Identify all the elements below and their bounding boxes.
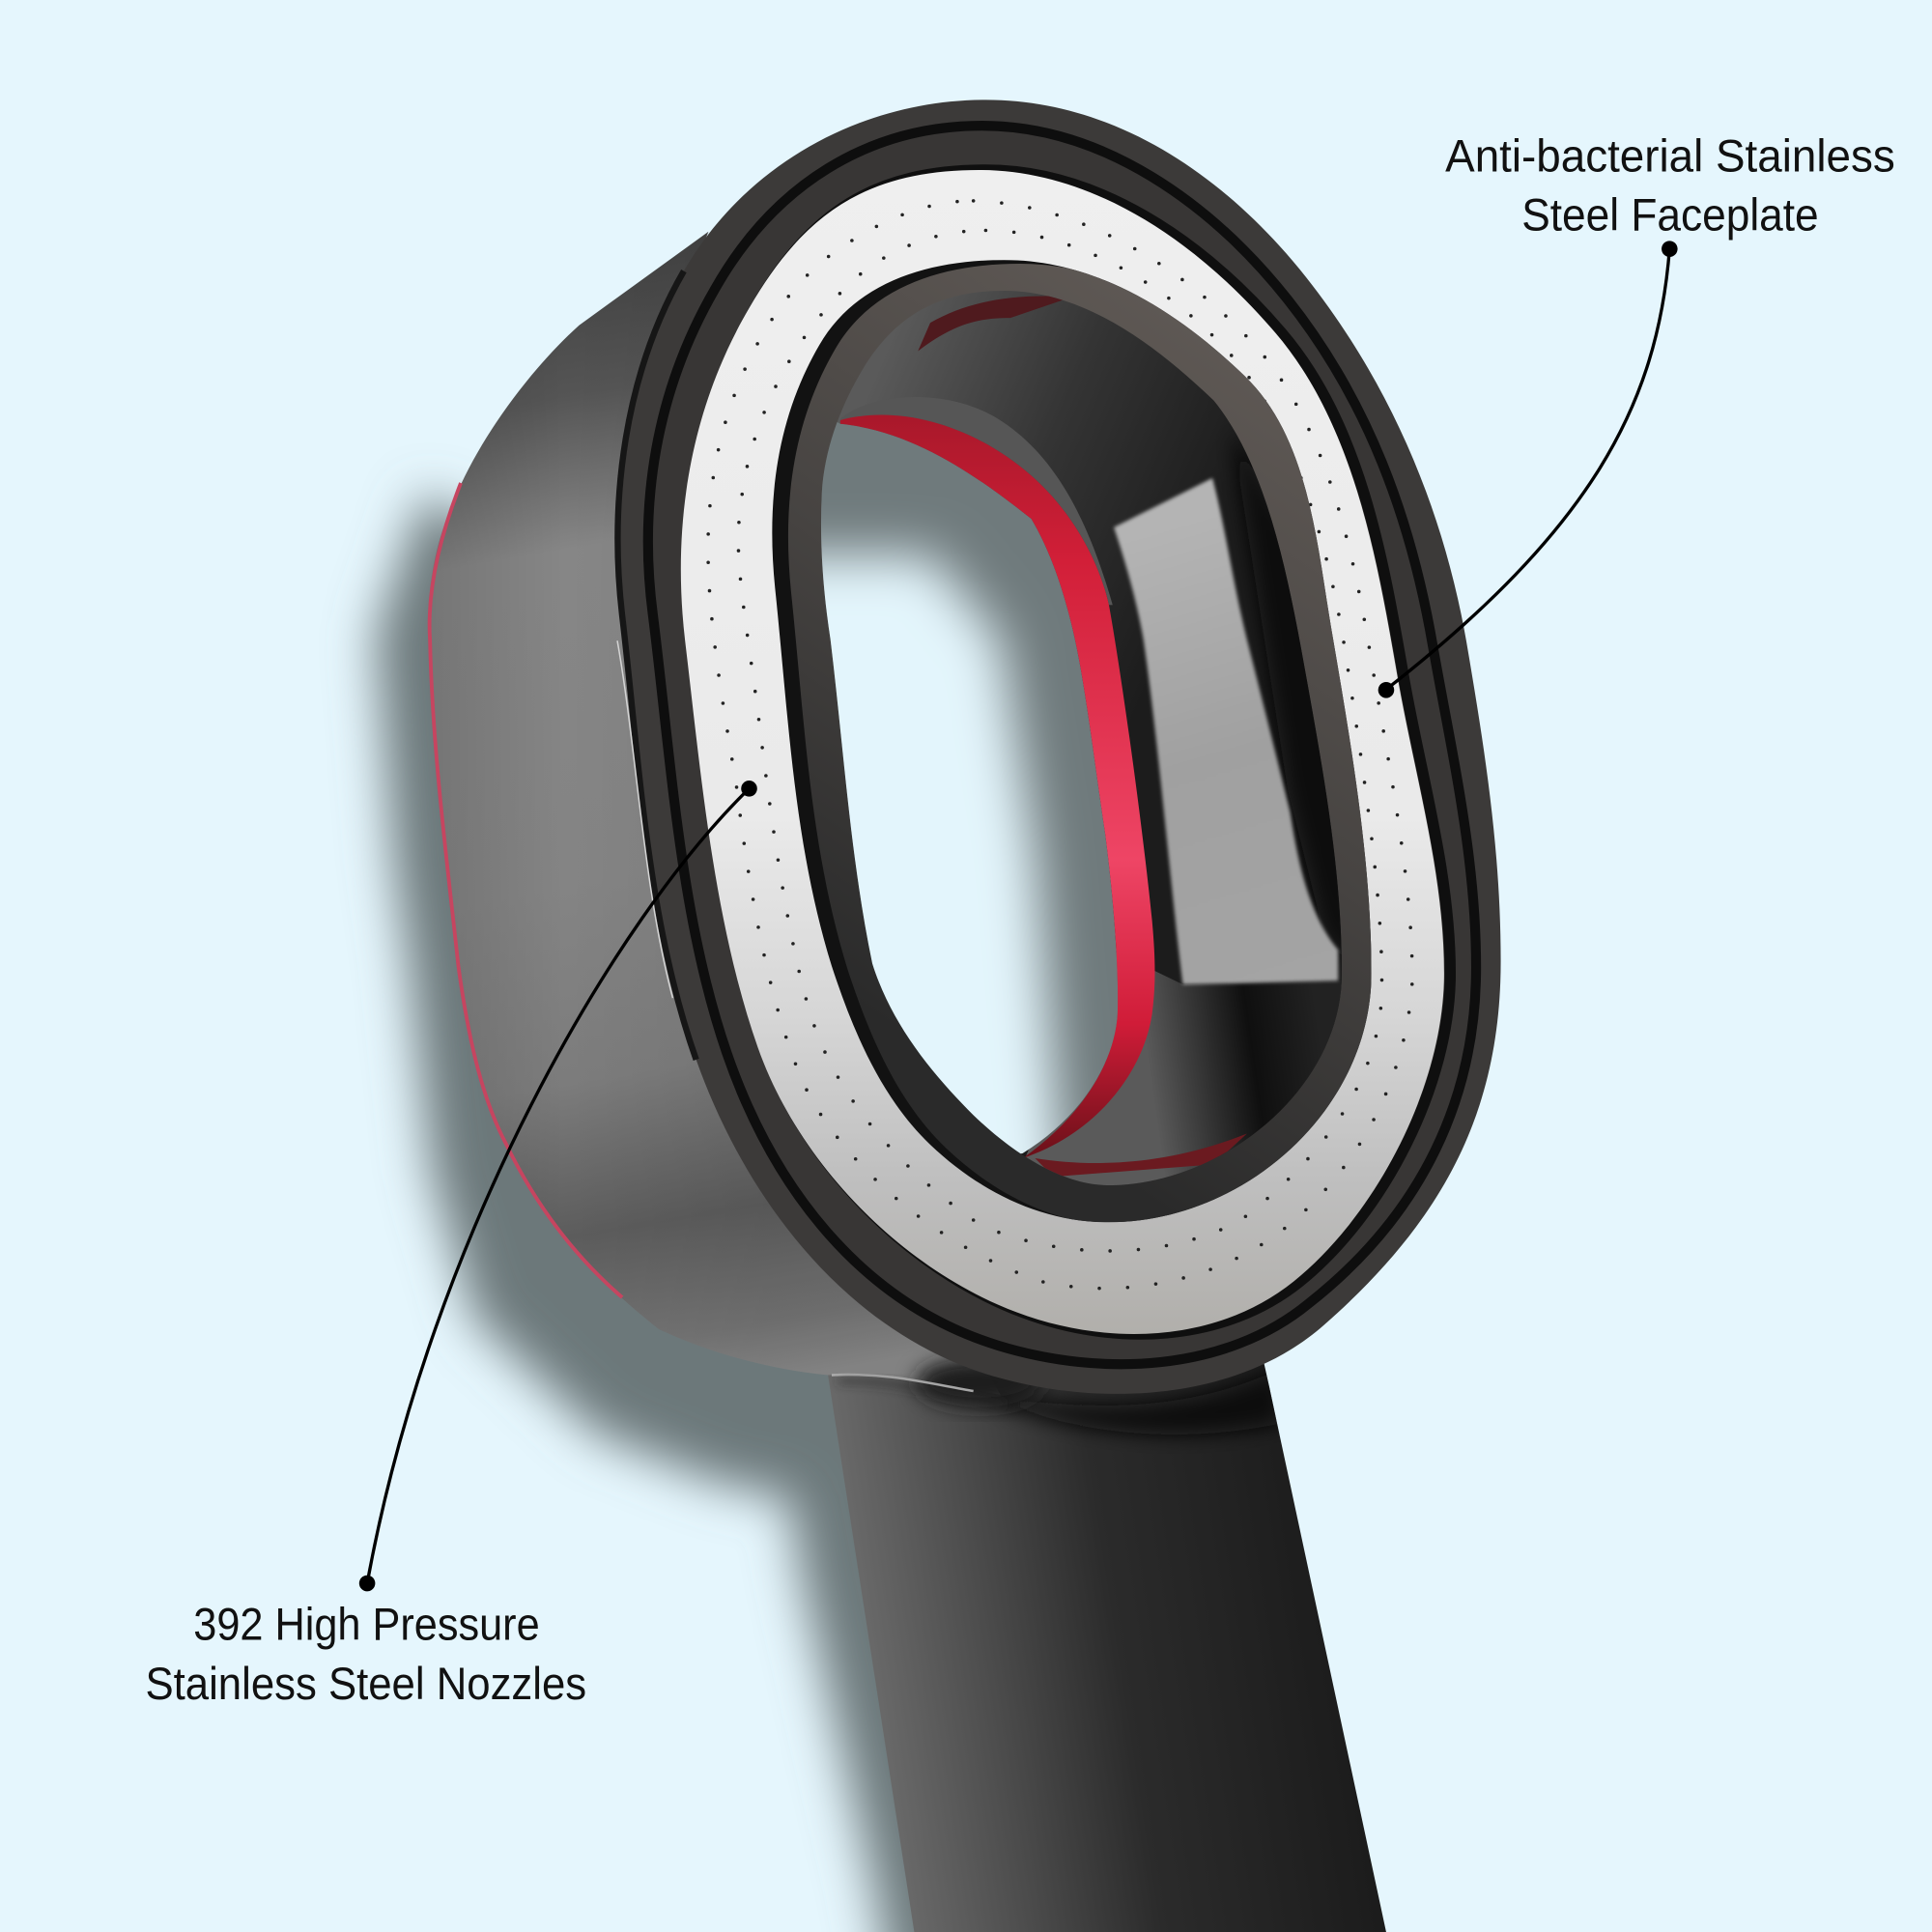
see-through opening — [821, 422, 1118, 1153]
callout: Anti-bacterial Stainless Steel Faceplate: Steel Faceplate — [1521, 190, 1819, 242]
stainless steel faceplate — [681, 170, 1444, 1334]
right shadow beside panel — [1233, 448, 1342, 962]
stem ridge highlight — [832, 1375, 974, 1391]
shower head body side — [428, 232, 1043, 1407]
interior of the loop — [821, 291, 1342, 1185]
drop shadow on wall — [376, 493, 1010, 1932]
black edge around faceplate — [687, 170, 1450, 1334]
thin light seam beside rim — [617, 640, 672, 998]
grey inner panel — [1114, 478, 1338, 984]
callout: Anti-bacterial Stainless Steel Faceplate: Anti-bacterial Stainless — [1445, 130, 1895, 182]
dark red reflection bottom — [1035, 1133, 1247, 1177]
red inner strip — [840, 414, 1154, 1158]
neck collar shading — [985, 1368, 1282, 1435]
callout: 392 High Pressure Stainless Steel Nozzles: Stainless Steel Nozzles — [146, 1659, 586, 1710]
handle stem — [828, 1331, 1386, 1932]
nozzle dots — [708, 201, 1412, 1289]
callout: Anti-bacterial Stainless Steel Faceplate — [1378, 130, 1895, 698]
rim outer dark edge on left — [617, 271, 696, 1060]
callout: 392 High Pressure Stainless Steel Nozzles: 392 High Pressure — [193, 1600, 540, 1651]
callout: 392 High Pressure Stainless Steel Nozzles — [146, 781, 757, 1710]
red accent line on body edge — [430, 483, 622, 1297]
dark red reflection top — [918, 297, 1072, 352]
dark blend where body meets neck — [916, 1358, 1043, 1407]
inner dark ring — [752, 246, 1392, 1244]
lower wall — [1026, 952, 1294, 1185]
black groove — [648, 126, 1476, 1364]
outer rim band — [617, 99, 1501, 1394]
grey lip above red strip — [921, 398, 1113, 605]
